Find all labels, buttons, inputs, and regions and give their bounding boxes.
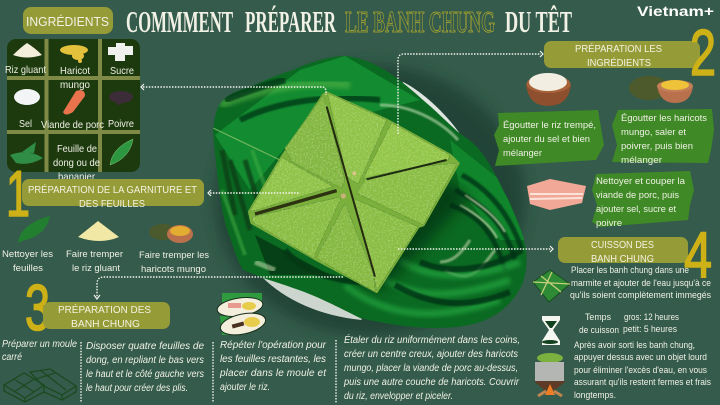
steps text: Nettoyer les — [2, 249, 53, 260]
icon: pepper — [109, 91, 133, 105]
icon: banh chung — [533, 270, 570, 302]
panel: brush B — [612, 109, 714, 163]
text: repeat: placer dans le moule et — [219, 368, 327, 379]
panel: ingredients grid: Feuille de — [57, 143, 97, 155]
logo: Vietnam+: Vietnam+ — [637, 3, 714, 19]
steps text: haricots mungo — [141, 264, 206, 275]
panel: ingredients grid: Viande de porc — [41, 119, 104, 131]
title — [126, 4, 572, 39]
text: pork: Nettoyer et couper la — [596, 176, 686, 187]
text: after cooking — [574, 340, 711, 401]
icon: dong leaf — [10, 142, 43, 164]
heading: ingrédients — [23, 7, 113, 34]
text: leaves — [86, 341, 204, 394]
steps text: le riz gluant — [72, 263, 120, 274]
text: repeat — [219, 340, 327, 393]
heading: step 2: PRÉPARATION LES — [575, 42, 662, 55]
divider lines — [81, 340, 336, 403]
heading: ingrédients: INGRÉDIENTS — [26, 14, 109, 29]
heading: step 3: BANH CHUNG — [71, 318, 140, 330]
text: repeat: les feuilles restantes, les — [220, 354, 326, 365]
icon: mung beans — [60, 45, 88, 63]
text: repeat: ajouter le riz. — [220, 382, 270, 393]
text: fill and wrap: du riz, envelopper et piceler. — [344, 391, 453, 402]
arrow: step 4 to cake — [398, 246, 553, 252]
number 1: 1 — [6, 157, 30, 230]
icon: banana leaf — [110, 139, 133, 165]
panel: ingredients grid: Riz gluant — [5, 64, 46, 76]
text: cooking: qu'ils soient complètement immegés — [570, 290, 711, 301]
heading: step 4: CUISSON DES — [591, 239, 654, 251]
panel: step 1 — [2, 157, 209, 275]
panel: step 4 — [533, 218, 712, 401]
panel: ingredients grid: mungo — [60, 79, 90, 91]
text: cooking time: petit: 5 heures — [623, 324, 677, 335]
heading: step 1 — [22, 179, 204, 210]
text: mould — [2, 339, 77, 363]
text: after cooking: Après avoir sorti les banh chung, — [574, 340, 695, 351]
central image: banh chung on a leaf — [205, 50, 535, 335]
heading: step 4 — [558, 237, 688, 265]
text: cooking: Placer les banh chung dans une — [571, 265, 689, 276]
text: mung beans: Égoutter les haricots — [621, 113, 707, 124]
text: mung beans: mélanger — [621, 155, 662, 166]
icon: square mould — [4, 369, 76, 402]
text: mung beans: poivrer, puis bien — [621, 141, 693, 152]
title: PRÉPARER — [245, 4, 336, 39]
text: pork: viande de porc, puis — [596, 190, 679, 201]
steps text: feuilles — [13, 263, 43, 274]
text: fill and wrap — [343, 333, 520, 402]
icon: rice bowl — [526, 73, 571, 106]
text: fill and wrap: puis une autre couche de haricots. Couvrir — [343, 377, 520, 388]
arrow: step 2 to cake — [398, 51, 543, 134]
text: fill and wrap: créer un centre creux, ajouter des haricots — [344, 349, 518, 360]
heading: step 3 — [43, 302, 170, 330]
text: mung beans — [621, 113, 707, 166]
text: cooking time: de cuisson — [579, 325, 619, 336]
text: pork: poivre — [596, 218, 622, 229]
text: cooking time: gros: 12 heures — [624, 312, 679, 323]
text: leaves: le haut pour créer des plis. — [86, 383, 188, 394]
steps text: Faire tremper — [66, 249, 123, 260]
text: mung beans: mungo, saler et — [621, 127, 686, 138]
text: after cooking: appuyer dessus avec un objet lourd — [574, 352, 707, 363]
text: rice — [503, 120, 596, 159]
panel: ingredients grid: Sel — [19, 118, 32, 130]
steps text: Faire tremper les — [139, 250, 209, 261]
title: LE BANH CHUNG — [345, 4, 495, 39]
icon: beans and bowl — [149, 224, 193, 243]
text: after cooking: longtemps. — [574, 390, 616, 401]
panel: brush A — [494, 110, 604, 166]
icon: soaked rice — [78, 221, 119, 241]
icon: pot on fire — [534, 353, 566, 396]
text: pork — [596, 176, 686, 229]
panel: ingredients grid: bananier — [58, 171, 95, 183]
icon: pork belly — [527, 179, 586, 210]
icon: hourglass — [542, 316, 560, 345]
icon: sticky rice — [13, 43, 42, 58]
text: rice: Égoutter le riz trempé, — [503, 120, 596, 131]
text: cooking — [570, 265, 711, 301]
heading: step 1: DES FEUILLES — [79, 198, 145, 210]
icon: salt — [14, 89, 40, 105]
arrow: step 1 to cake — [208, 190, 300, 196]
text: rice: ajouter du sel et bien — [503, 134, 590, 145]
steps text — [2, 249, 209, 275]
panel: ingredients grid: Poivre — [108, 118, 134, 130]
text: mould: carré — [2, 352, 22, 363]
text: fill and wrap: mungo, placer la viande de porc au-dessus, — [344, 363, 518, 374]
text: leaves: dong, en repliant le bas vers — [86, 355, 204, 366]
arrow: ingredients to cake — [141, 84, 326, 95]
text: pork: ajouter sel, sucre et — [596, 204, 676, 215]
number 4: 4 — [684, 218, 712, 291]
icon: sugar cubes — [108, 43, 133, 61]
panel: ingredients grid — [5, 39, 140, 183]
icon: mung beans bowl — [629, 76, 693, 103]
heading: step 4: BANH CHUNG — [591, 253, 654, 265]
text: fill and wrap: Étaler du riz uniformément dans les coins, — [344, 333, 520, 346]
heading: step 1: PRÉPARATION DE LA GARNITURE ET — [28, 183, 198, 196]
heading: step 2 — [544, 41, 700, 69]
text: leaves: le haut et le côté gauche vers — [86, 369, 204, 380]
text: cooking time — [579, 312, 679, 336]
heading: step 2: INGRÉDIENTS — [587, 56, 651, 69]
panel: ingredients grid: dong ou de — [53, 157, 100, 169]
icon: pork — [63, 90, 85, 114]
text: rice: mélanger — [503, 148, 542, 159]
text: after cooking: pour éliminer l'excès d'eau, en vous — [574, 365, 707, 376]
panel: step 3 — [2, 271, 520, 403]
text: leaves: Disposer quatre feuilles de — [86, 341, 204, 352]
text: mould: Préparer un moule — [2, 339, 77, 350]
panel: ingredients grid: Haricot — [60, 65, 90, 77]
title: COMMMENT — [126, 4, 233, 39]
arrow: step 3 to cake — [94, 277, 343, 299]
number 3: 3 — [25, 271, 50, 344]
heading: step 3: PRÉPARATION DES — [58, 303, 151, 316]
title: DU TÊT — [505, 4, 572, 39]
panel: brush C — [592, 171, 694, 227]
panel: ingredients grid: Sucre — [110, 65, 134, 77]
panel: step 2 — [494, 16, 716, 229]
text: cooking time: Temps — [585, 312, 611, 323]
icon: leaf — [18, 216, 50, 243]
icon: cut banh chung — [216, 293, 268, 339]
text: repeat: Répéter l'opération pour — [220, 340, 327, 351]
